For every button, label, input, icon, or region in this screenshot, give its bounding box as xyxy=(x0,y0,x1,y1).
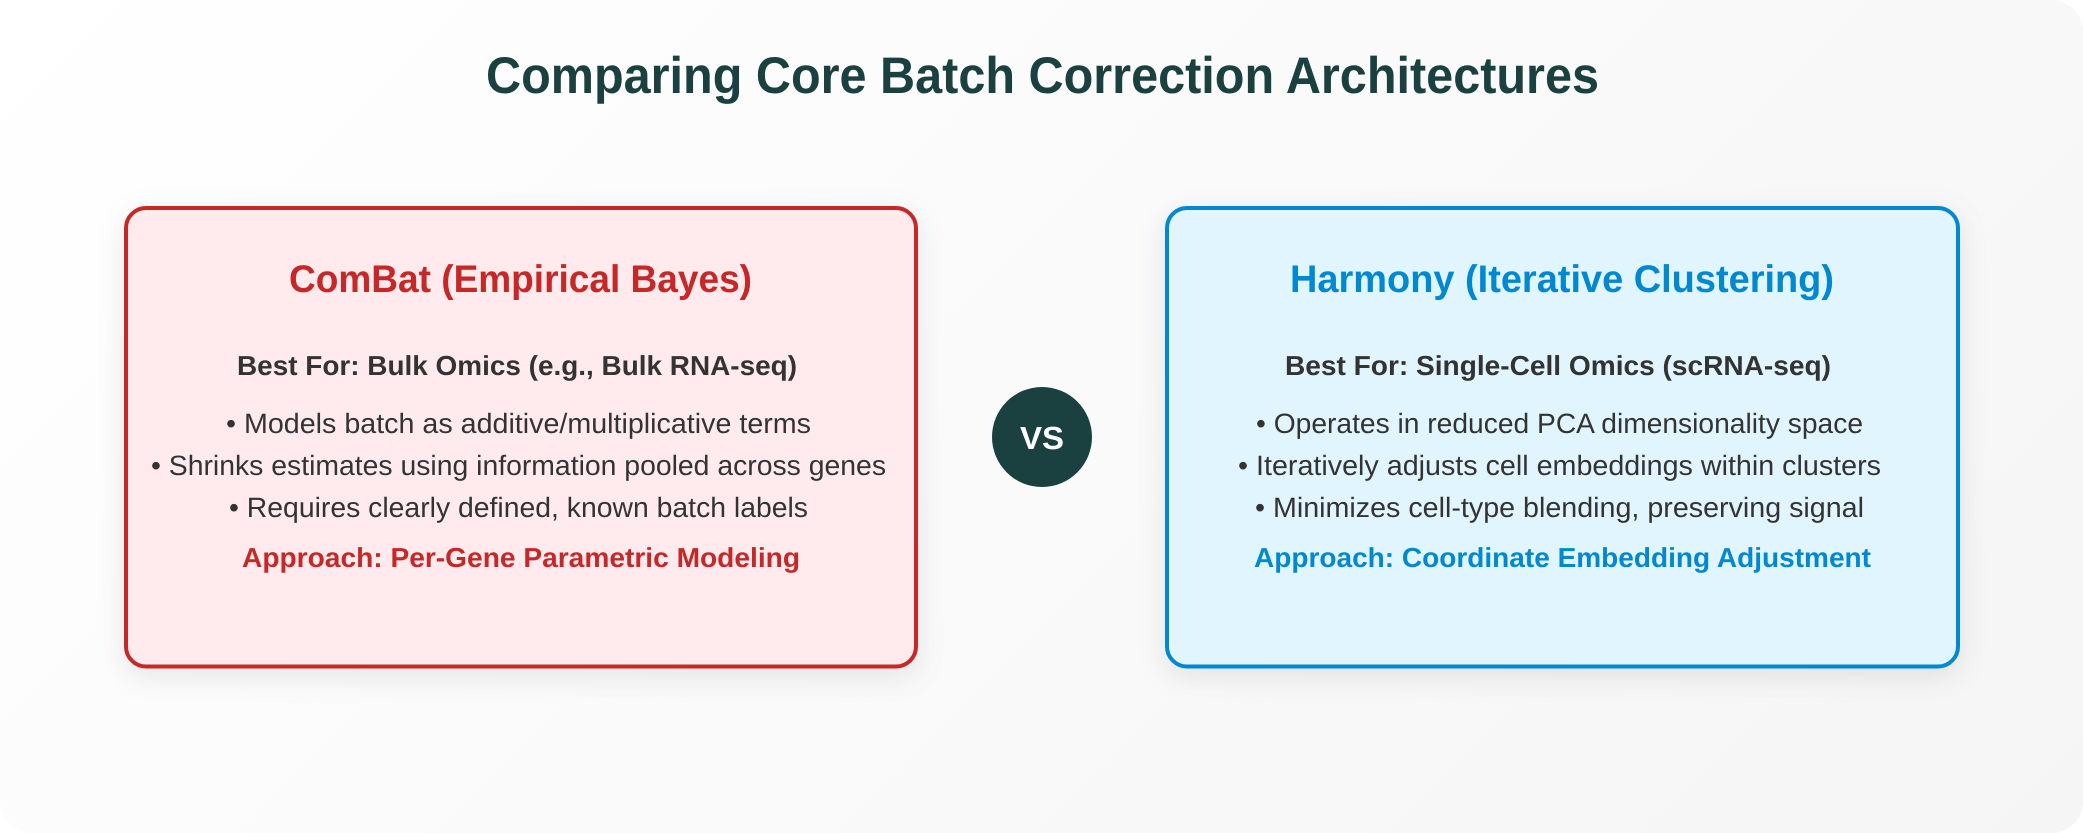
bullet list: ComBat: • Shrinks estimates using information pooled across genes xyxy=(151,450,886,481)
title: Comparing Core Batch Correction Architectures xyxy=(486,46,1599,104)
bullet list: ComBat: • Models batch as additive/multiplicative terms xyxy=(226,408,811,439)
bullet list: ComBat xyxy=(151,408,886,523)
heading: ComBat: ComBat (Empirical Bayes) xyxy=(289,258,752,301)
VS badge: VS xyxy=(1020,420,1064,456)
bullet list: Harmony xyxy=(1238,408,1881,523)
heading: Harmony: Harmony (Iterative Clustering) xyxy=(1290,258,1834,301)
bullet list: ComBat: • Requires clearly defined, known batch labels xyxy=(229,492,808,523)
panel: ComBat xyxy=(126,208,916,666)
text: best for bulk omics: Best For: Bulk Omics (e.g., Bulk RNA-seq) xyxy=(237,350,797,381)
bullet list: Harmony: • Iteratively adjusts cell embeddings within clusters xyxy=(1238,450,1881,481)
text: Harmony approach: Approach: Coordinate Embedding Adjustment xyxy=(1254,542,1871,573)
panel: Harmony xyxy=(1167,208,1958,666)
panel box: ComBat xyxy=(126,208,916,666)
panel box: Harmony xyxy=(1167,208,1958,666)
VS badge xyxy=(992,387,1092,487)
bullet list: Harmony: • Operates in reduced PCA dimensionality space xyxy=(1256,408,1863,439)
bullet list: Harmony: • Minimizes cell-type blending, preserving signal xyxy=(1255,492,1864,523)
text: ComBat approach: Approach: Per-Gene Parametric Modeling xyxy=(242,542,800,573)
text: best for single-cell omics: Best For: Single-Cell Omics (scRNA-seq) xyxy=(1285,350,1831,381)
